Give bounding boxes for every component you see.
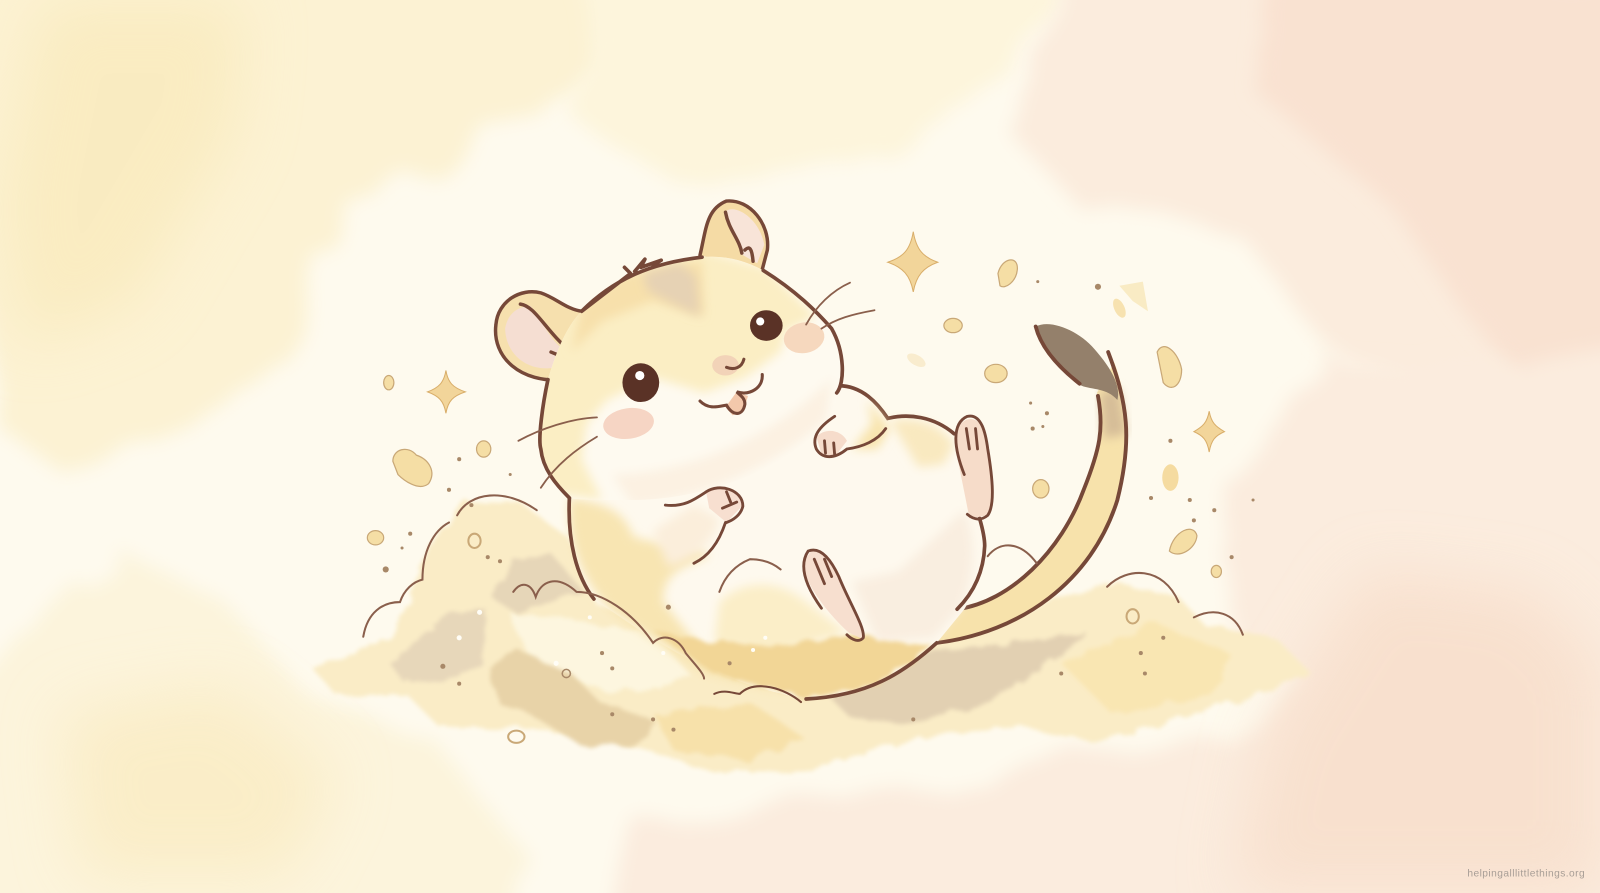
wash: top-middle yellow [577, 0, 1082, 179]
body top yellow wash [890, 419, 954, 467]
wash: top-left yellow [0, 0, 612, 480]
tail tip tuft [1036, 324, 1118, 400]
upper right foot outline [956, 416, 992, 519]
sand: golden patch bottom [653, 704, 806, 760]
right ear fill [700, 200, 768, 273]
paw outline [815, 416, 886, 457]
left ear [496, 292, 587, 380]
sand: golden tan blotch [490, 648, 653, 745]
mouse head [496, 200, 874, 505]
right cheek blush [781, 319, 827, 356]
lower arm wash [653, 505, 719, 566]
left eye pupil [622, 363, 659, 402]
right ear inner pink [724, 209, 764, 263]
sand: right tan shadow [832, 633, 1087, 727]
body right peach wash [852, 510, 973, 643]
sand foreground arcs [363, 495, 1243, 702]
sand: pale base wash [312, 500, 1311, 771]
lower paw outline [665, 488, 743, 563]
right ear [700, 200, 768, 273]
sand: tan blotch near body [492, 553, 584, 612]
upper right foot [954, 416, 992, 519]
body outline [569, 386, 985, 699]
head lower shading [620, 389, 828, 500]
head watercolor [531, 250, 832, 505]
tail stripes [1100, 388, 1127, 439]
left ear inner pink [505, 306, 563, 368]
sand: tan blotch left [390, 610, 488, 682]
sparkle: large [888, 232, 938, 292]
body left yellow wash [569, 498, 786, 694]
left cheek blush [601, 405, 656, 442]
lower arm and paw [653, 487, 743, 566]
tail outline [937, 327, 1126, 643]
mouse tail [937, 324, 1128, 643]
watermark: helpingalllittlethings.org [1467, 869, 1585, 880]
sparkle: right [1194, 411, 1224, 452]
head outline [540, 257, 842, 498]
nose [712, 355, 739, 376]
paw pink fill [816, 431, 847, 457]
right eye highlight [756, 317, 764, 326]
sparkles [428, 232, 1224, 452]
whiskers right [806, 283, 874, 329]
left eye [622, 363, 659, 402]
mouth [700, 359, 762, 413]
lower foot [804, 550, 864, 640]
wash: bottom-left yellow [0, 551, 520, 893]
wash: top-left deep yellow [0, 0, 245, 347]
right ear outline [700, 201, 768, 273]
tail fill [937, 362, 1128, 643]
tongue [726, 392, 748, 415]
mouse [496, 200, 1128, 699]
wash: bottom-left deep yellow [61, 684, 337, 878]
sand pile [312, 500, 1311, 771]
left ear fill [496, 292, 587, 380]
lower foot fill [804, 550, 864, 639]
body fill [570, 386, 983, 699]
head tan patch [643, 263, 700, 316]
mouse body [569, 386, 985, 699]
lower paw pink fill [706, 487, 743, 522]
left eye highlight [635, 371, 644, 380]
arm wash [852, 400, 890, 449]
head orange back patch [571, 260, 704, 352]
upper right foot fill [954, 419, 992, 518]
sand white highlights [457, 610, 767, 666]
sand specks [383, 280, 1255, 732]
wash: top-right deep pink [1255, 0, 1600, 393]
upper arm and paw [815, 400, 890, 457]
lower foot outline [804, 550, 863, 640]
head fill [540, 257, 842, 500]
right eye pupil [750, 310, 783, 341]
sand: right yellow patch [1061, 622, 1230, 714]
wash: lower-right deep peach [1235, 571, 1600, 893]
sand grains [367, 260, 1221, 743]
whiskers left [518, 417, 597, 488]
head yellow wash [531, 250, 816, 500]
body gold shadow under mouse [653, 631, 934, 698]
sand: top-left lighter mound [510, 612, 694, 694]
wash: lower-right peach [612, 347, 1600, 893]
left ear outline [496, 292, 582, 380]
wash: top-right peach [1010, 0, 1600, 408]
right eye [750, 310, 783, 341]
sparkle: left [428, 370, 465, 413]
body pale sand mound [714, 585, 847, 653]
